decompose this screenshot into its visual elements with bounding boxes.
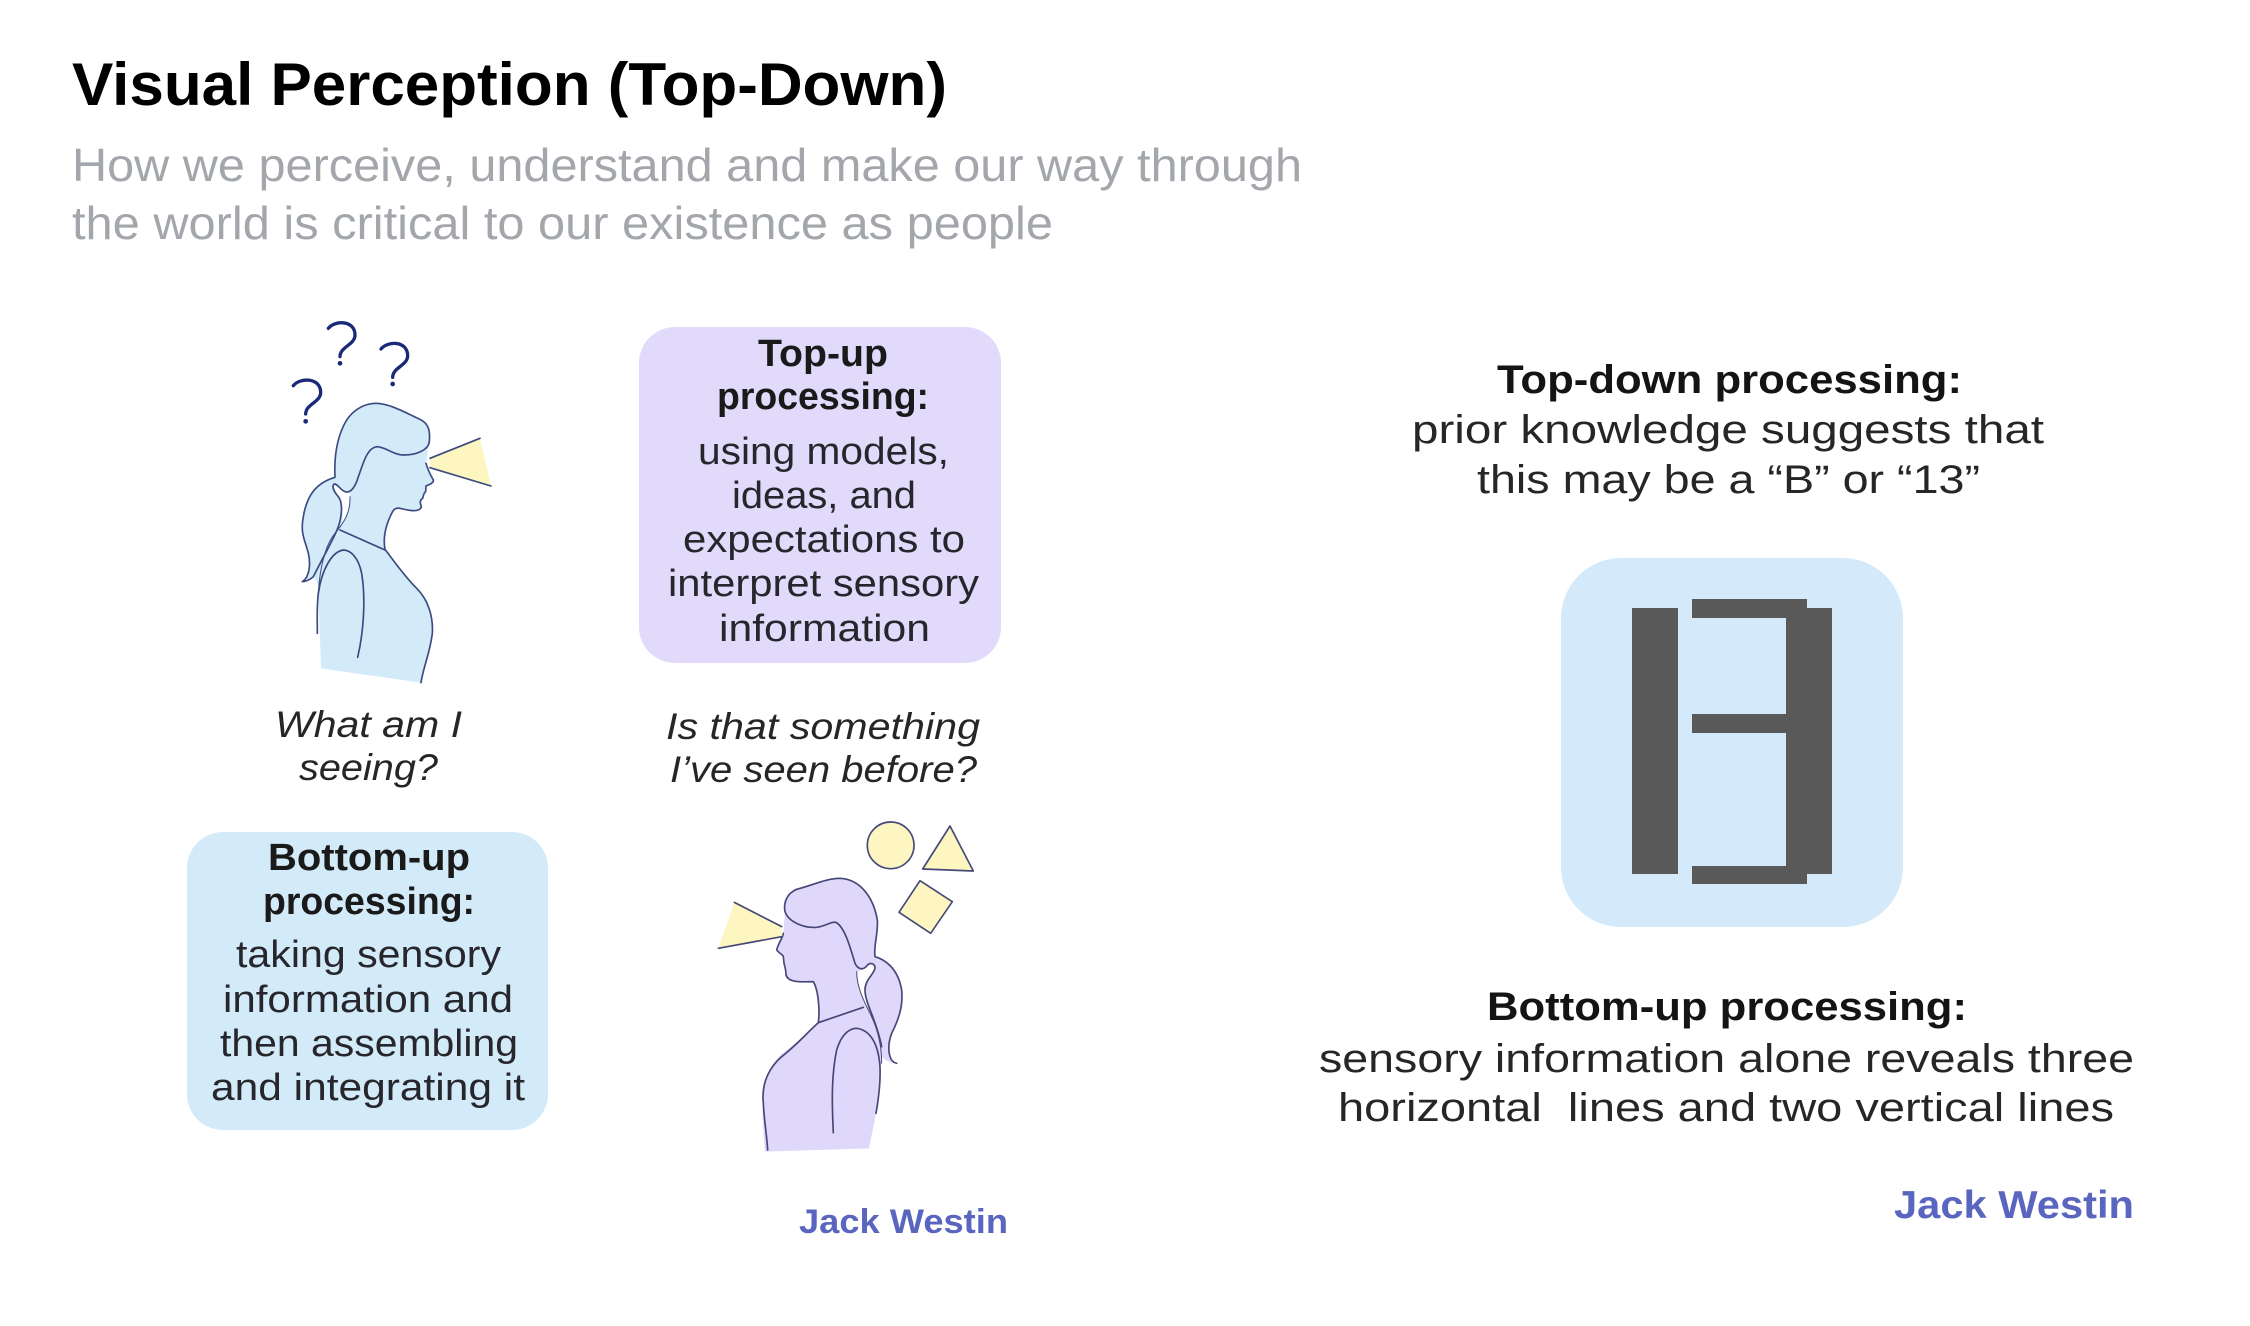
brand: Jack Westin right: Jack Westin [1894, 1184, 2134, 1227]
text: bottom-up processing: Bottom-up processing: [1487, 985, 1967, 1029]
heading: bottom-up processing: Bottom-up [268, 837, 470, 879]
heading: bottom-up processing [263, 837, 475, 923]
subtitle: the world is critical to our existence as people [72, 197, 1053, 249]
panel: bottom-up processing [187, 832, 548, 1130]
text: top-up description: interpret sensory [668, 563, 979, 605]
subtitle [72, 139, 1302, 249]
icon: blue woman looking with question marks [293, 323, 491, 683]
caption: what am I seeing: What am I [275, 704, 462, 745]
text: top-up description: ideas, and [732, 475, 916, 517]
panel: top-up processing [639, 327, 1001, 663]
caption: what am I seeing [275, 704, 462, 788]
text: top-down processing: prior knowledge suggests that [1412, 408, 2044, 452]
heading: top-up processing: Top-up [758, 333, 888, 375]
heading: top-up processing: processing: [717, 376, 929, 418]
text: bottom-up processing: horizontal lines and two vertical lines [1338, 1086, 2114, 1130]
text: top-up description: expectations to [683, 519, 965, 561]
text: bottom-up description: taking sensory [236, 934, 501, 976]
icon: purple woman looking at shapes [718, 822, 973, 1152]
text: top-down processing [1412, 358, 2044, 502]
text: bottom-up description [211, 934, 525, 1109]
text: top-up description: using models, [698, 431, 949, 473]
subtitle: How we perceive, understand and make our way through [72, 139, 1302, 191]
caption: is that something I've seen before [666, 706, 980, 790]
caption: is that something I've seen before: Is that something [666, 706, 980, 747]
text: top-up description: information [719, 608, 930, 650]
caption: what am I seeing: seeing? [299, 747, 438, 788]
text: top-down processing: Top-down processing: [1497, 358, 1962, 402]
figure: ambiguous 13 or B [1561, 558, 1903, 927]
text: bottom-up processing [1319, 985, 2134, 1130]
brand: Jack Westin left: Jack Westin [799, 1203, 1008, 1241]
text: bottom-up processing: sensory information alone reveals three [1319, 1037, 2134, 1081]
text: top-up description [668, 431, 979, 650]
text: top-down processing: this may be a “B” or “13” [1477, 458, 1980, 502]
title: Visual Perception (Top-Down) [72, 51, 947, 118]
heading: bottom-up processing: processing: [263, 881, 475, 923]
text: bottom-up description: then assembling [220, 1023, 518, 1065]
text: bottom-up description: and integrating it [211, 1067, 525, 1109]
caption: is that something I've seen before: I’ve seen before? [670, 749, 977, 790]
heading: top-up processing [717, 333, 929, 418]
text: bottom-up description: information and [223, 979, 513, 1021]
